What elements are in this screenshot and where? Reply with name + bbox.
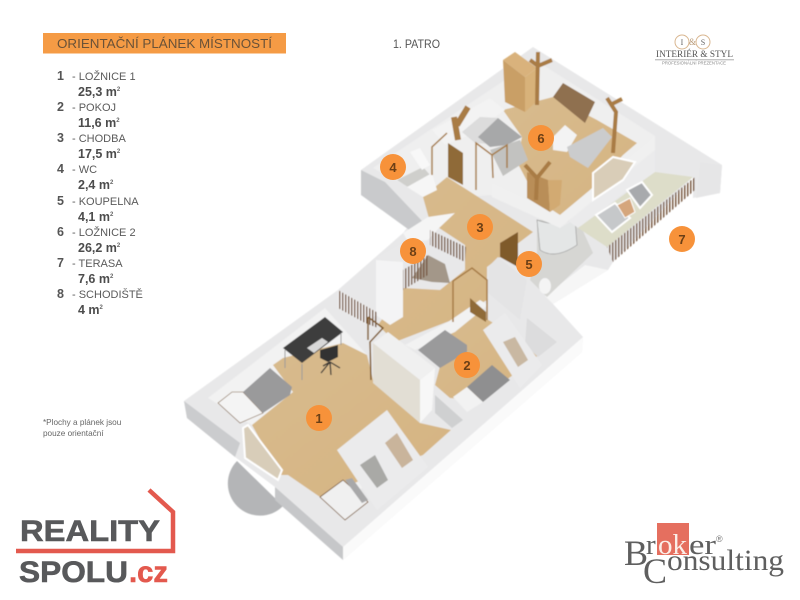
logo: reality spolu: .cz xyxy=(129,556,168,589)
room legend: 7,6 m xyxy=(78,272,110,286)
logo: broker consulting xyxy=(624,523,784,591)
wc floor xyxy=(397,167,430,187)
doors xyxy=(368,133,518,380)
dormer: room 1 xyxy=(337,410,428,510)
interior & styl logo: S xyxy=(701,38,705,47)
room legend: 2 xyxy=(100,305,104,311)
bed: room 1 lower xyxy=(320,478,368,520)
logo: broker consulting: onsulting xyxy=(667,544,784,577)
terrace railing xyxy=(607,177,695,262)
room marker 7 xyxy=(669,226,695,252)
stair box xyxy=(412,255,450,283)
room legend xyxy=(57,69,143,317)
dormer: room 2 xyxy=(483,313,542,388)
room legend: 4 xyxy=(57,162,64,176)
outer wall faces xyxy=(184,162,722,560)
room legend: 8 xyxy=(57,287,64,301)
interior & styl logo: & xyxy=(689,37,696,47)
stair railings xyxy=(338,230,466,328)
room legend: 2 xyxy=(110,180,114,186)
room legend: 2 xyxy=(110,274,114,280)
wall strip room 6 / terrace xyxy=(492,136,655,228)
room legend: 2 xyxy=(117,149,121,155)
interior & styl logo xyxy=(655,35,734,66)
desk with chair xyxy=(283,317,343,380)
interior & styl logo: PROFESIONÁLNÍ PREZENTACE xyxy=(662,60,726,66)
room marker 3 xyxy=(467,214,493,240)
logo: broker consulting: ® xyxy=(716,534,723,544)
room marker 1 xyxy=(306,405,332,431)
room legend: 11,6 m xyxy=(78,116,116,130)
room legend: - KOUPELNA xyxy=(72,196,139,208)
logo: broker consulting: B xyxy=(624,533,648,573)
floor plan xyxy=(184,47,722,560)
room legend: 2 xyxy=(117,87,121,93)
room marker 6 xyxy=(528,125,554,151)
room legend: - LOŽNICE 1 xyxy=(72,70,136,83)
room legend: - CHODBA xyxy=(72,133,126,145)
room legend: 6 xyxy=(57,225,64,239)
room marker 5 xyxy=(516,251,542,277)
terrace floor xyxy=(578,172,693,247)
storage nook xyxy=(525,318,557,357)
wc toilet xyxy=(410,148,430,170)
room 6 floor xyxy=(503,97,637,215)
room marker 6: 6 xyxy=(537,131,545,146)
wardrobe block xyxy=(373,332,435,423)
room marker 2 xyxy=(454,352,480,378)
room legend: 2 xyxy=(57,100,64,114)
room legend: 5 xyxy=(57,194,64,208)
floor label: 1. PATRO xyxy=(393,37,440,51)
balcony half circle xyxy=(228,461,283,516)
room legend: 2 xyxy=(110,212,114,218)
room legend: - SCHODIŠTĚ xyxy=(72,288,143,301)
chimney block xyxy=(376,240,428,325)
room legend: 3 xyxy=(57,131,64,145)
room legend: 2,4 m xyxy=(78,178,110,192)
room 2 floor xyxy=(435,312,542,400)
room 1 french door xyxy=(243,425,282,480)
bed: room 2 upper xyxy=(418,330,467,368)
room legend: 1 xyxy=(57,69,64,83)
roof beam by double bed xyxy=(454,107,468,140)
room marker 8: 8 xyxy=(409,244,417,259)
terrace furniture xyxy=(596,182,652,232)
upper wing inner walls xyxy=(373,60,655,218)
room legend: - WC xyxy=(72,164,97,176)
hall entry wall xyxy=(407,173,437,197)
room legend: - POKOJ xyxy=(72,102,116,114)
room marker 4: 4 xyxy=(389,160,397,175)
shower glass xyxy=(537,218,577,254)
outer shell xyxy=(184,47,722,560)
footnote: pouze orientační xyxy=(43,429,104,438)
logo: reality spolu: SPOLU xyxy=(19,556,128,589)
room legend: 4 m xyxy=(78,303,100,317)
stairs landing xyxy=(403,213,455,250)
title bar xyxy=(43,33,286,54)
wall between bedrooms xyxy=(435,395,463,428)
logo: reality spolu: REALITY xyxy=(20,515,160,548)
room legend: - TERASA xyxy=(72,258,123,270)
terrace french window xyxy=(593,157,635,200)
room legend: 2 xyxy=(117,243,121,249)
bed: room 2 lower xyxy=(453,365,510,412)
double bed xyxy=(432,98,528,176)
footnote: *Plochy a plánek jsou xyxy=(43,418,122,427)
bed: room 1 upper xyxy=(218,368,292,423)
logo: broker consulting: er xyxy=(689,529,716,561)
room marker 5: 5 xyxy=(525,257,533,272)
lower wing inner walls xyxy=(208,308,451,500)
room marker 2: 2 xyxy=(463,358,471,373)
title bar: ORIENTAČNÍ PLÁNEK MÍSTNOSTÍ xyxy=(57,36,272,51)
footnote xyxy=(43,418,122,438)
room legend: 4,1 m xyxy=(78,210,110,224)
room legend: 7 xyxy=(57,256,64,270)
room marker 8 xyxy=(400,238,426,264)
toilet xyxy=(539,278,551,294)
logo: broker consulting: C xyxy=(643,551,667,591)
room legend: 2 xyxy=(116,118,120,124)
room legend: - LOŽNICE 2 xyxy=(72,226,136,239)
room marker 7: 7 xyxy=(678,232,686,247)
room 6 furniture xyxy=(503,52,612,212)
room legend: 25,3 m xyxy=(78,85,117,99)
wall beside hall xyxy=(488,257,527,320)
room marker 4 xyxy=(380,154,406,180)
room legend: 17,5 m xyxy=(78,147,117,161)
logo: reality spolu xyxy=(16,490,173,589)
roof beams xyxy=(525,52,622,200)
room marker 3: 3 xyxy=(476,220,484,235)
room marker 1: 1 xyxy=(315,411,323,426)
room 1 floor xyxy=(252,343,451,497)
logo: broker consulting: ok xyxy=(658,529,688,561)
interior & styl logo: I xyxy=(681,38,684,47)
hall floor xyxy=(378,177,533,342)
room legend: 26,2 m xyxy=(78,241,117,255)
bathroom floor xyxy=(530,218,593,297)
logo: broker consulting: r xyxy=(646,529,656,561)
interior & styl logo: INTERIÉR & STYL xyxy=(656,48,733,60)
